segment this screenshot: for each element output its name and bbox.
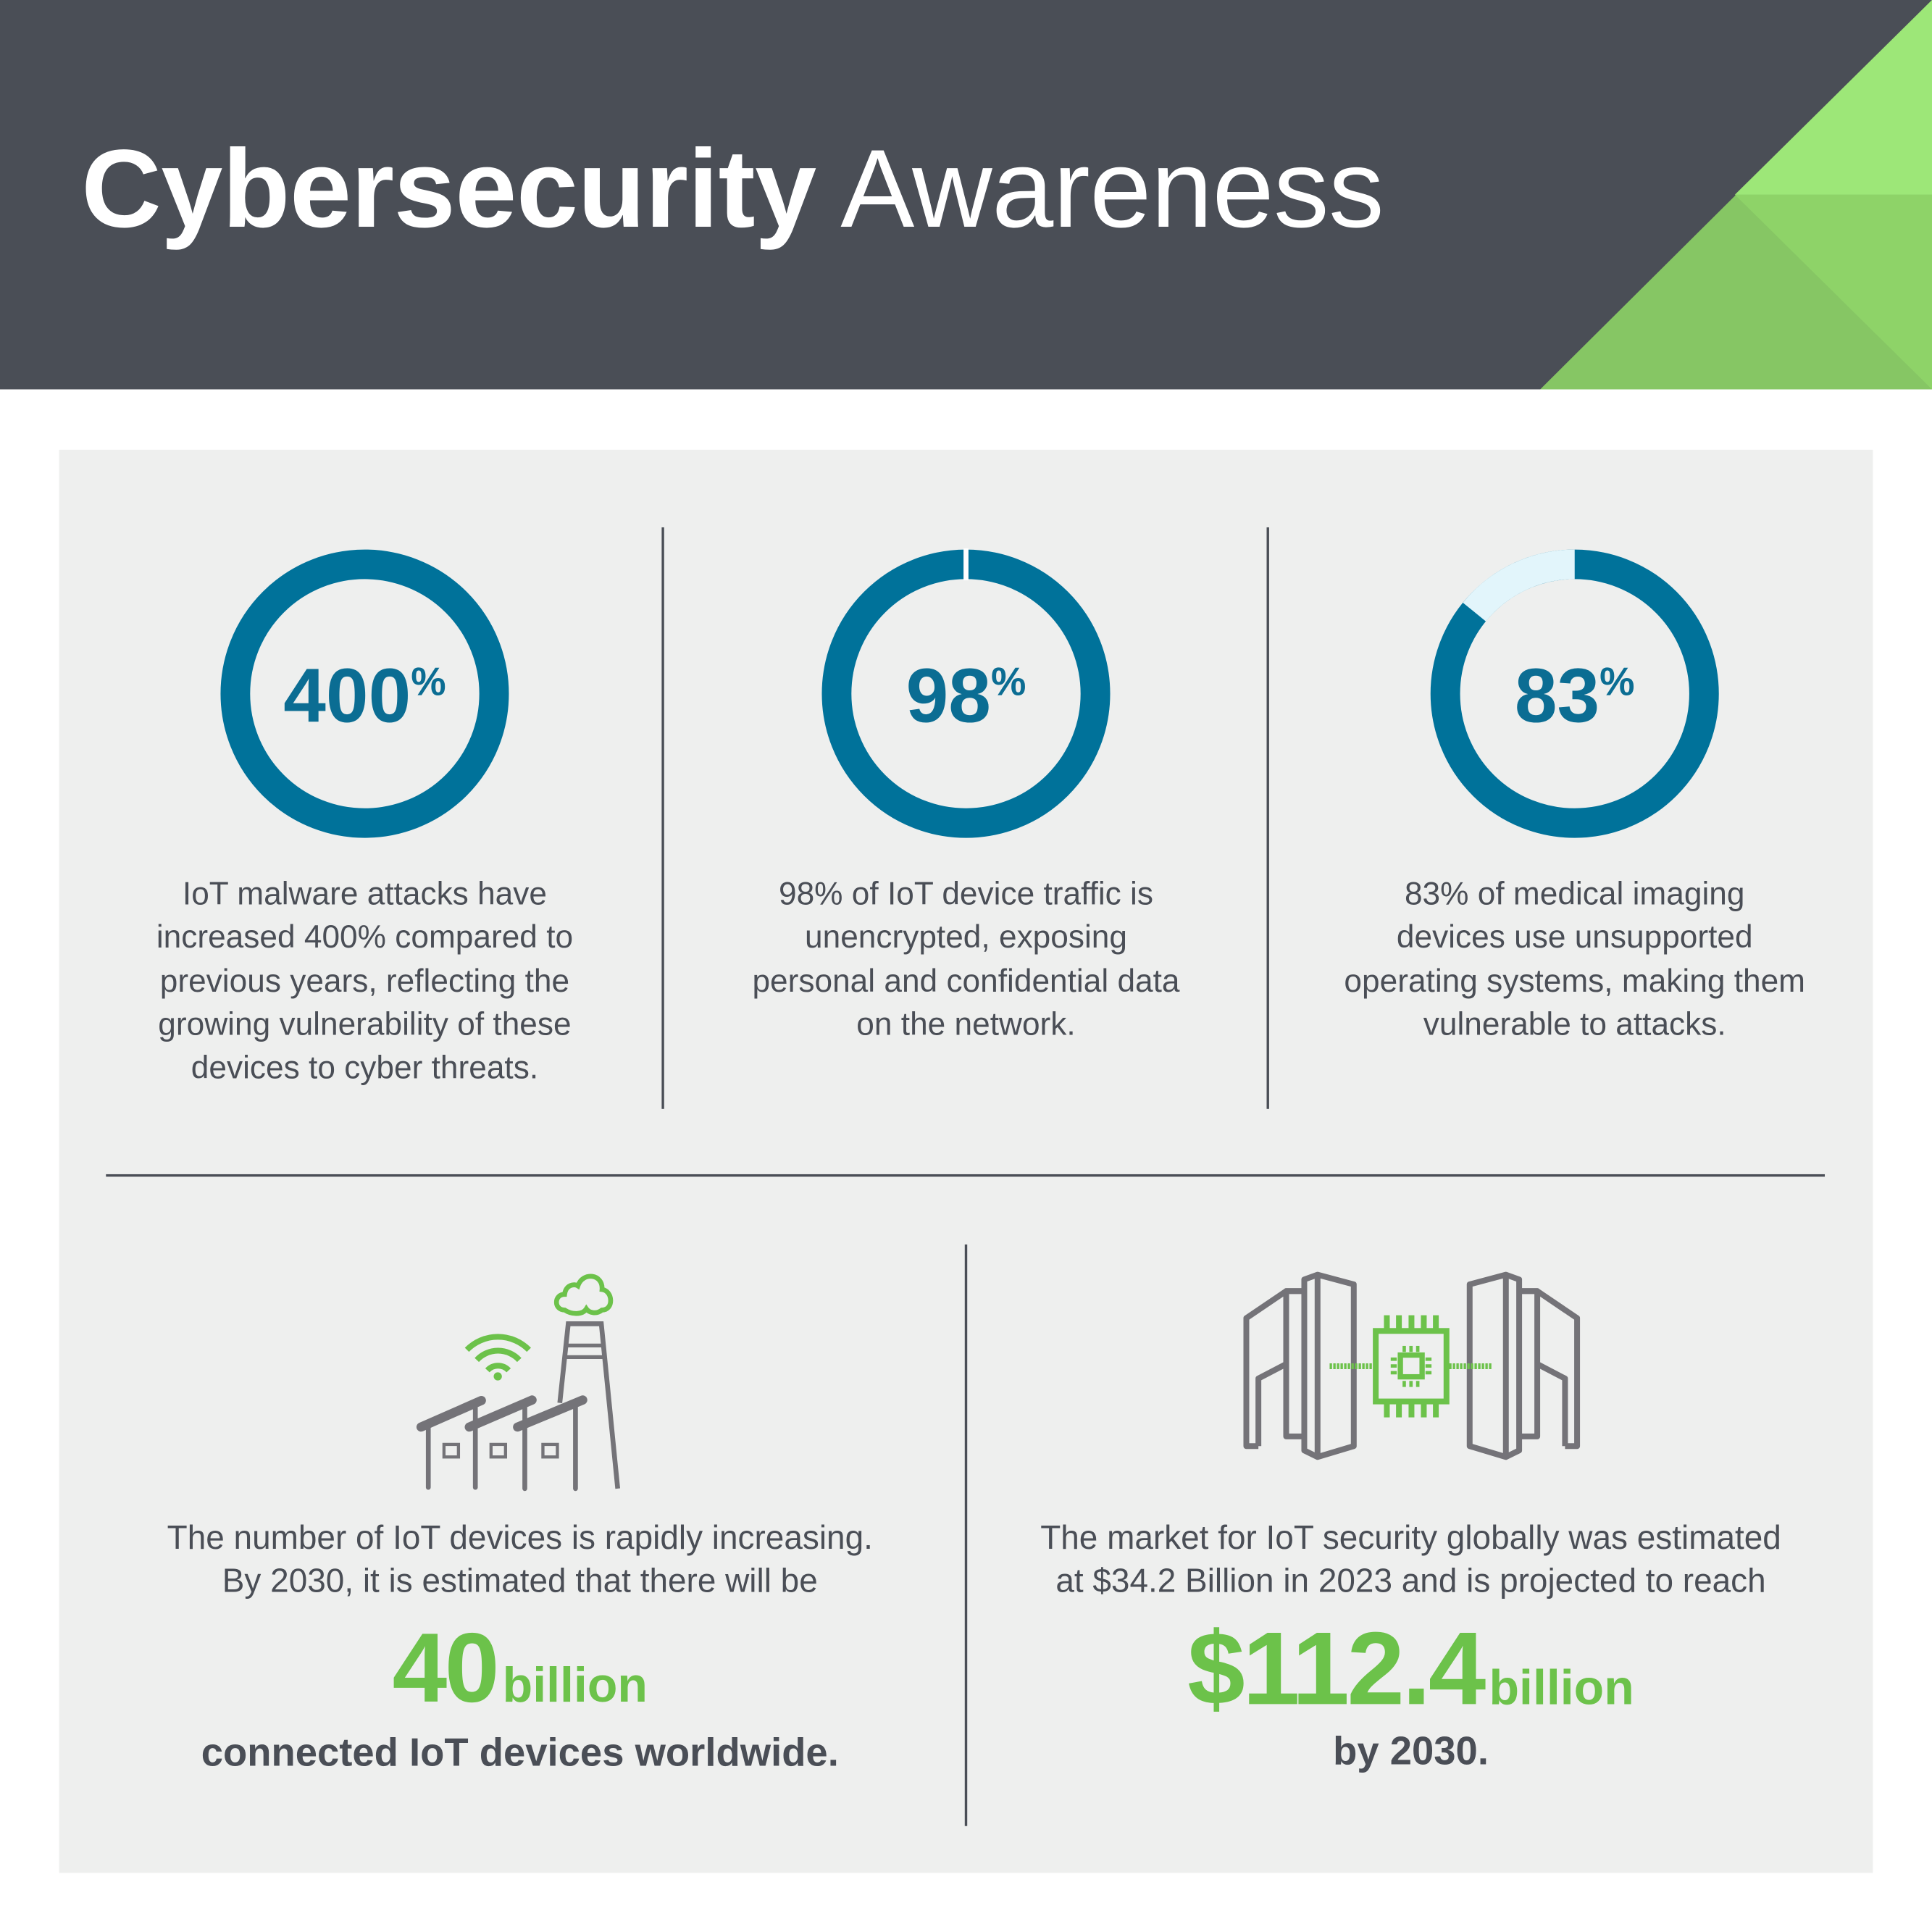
text: 98% description: on the network.	[856, 1005, 1076, 1042]
ring chart: 98%	[821, 548, 1110, 838]
text: IoT devices growth: connected IoT devices worldwide.	[201, 1729, 839, 1774]
header decoration: green triangles	[1540, 0, 1932, 390]
text: 83% description: 83% of medical imaging	[1405, 875, 1744, 912]
text: 400% description	[156, 875, 573, 1086]
big stat: 40 billion: 40 billion	[393, 1613, 648, 1722]
text: 400% description: devices to cyber threats.	[191, 1049, 538, 1086]
text: IoT devices growth: By 2030, it is estimated that there will be	[222, 1563, 818, 1599]
text: 83% description: operating systems, making them	[1344, 962, 1805, 999]
big stat: $112.4 billion: $112.4 billion	[1187, 1610, 1634, 1726]
title: Cybersecurity Awareness	[81, 128, 1384, 251]
text: 400% description: growing vulnerability of these	[158, 1005, 572, 1042]
text: IoT devices growth	[167, 1519, 873, 1774]
ring chart: 400%: 400%	[283, 654, 446, 740]
text: 83% description	[1344, 875, 1805, 1042]
ring chart: 400%	[220, 549, 509, 838]
text: 400% description: previous years, reflecting the	[160, 962, 569, 999]
text: IoT security market: The market for IoT security globally was estimated	[1040, 1519, 1781, 1556]
text: 83% description: devices use unsupported	[1397, 919, 1753, 955]
ring chart: 83%: 83%	[1515, 654, 1635, 740]
text: IoT security market: by 2030.	[1333, 1728, 1489, 1773]
ring chart: 83%	[1430, 549, 1719, 838]
text: 400% description: increased 400% compared to	[156, 919, 573, 955]
icon: servers with chip	[1243, 1272, 1581, 1460]
text: 98% description	[752, 875, 1180, 1042]
text: IoT security market: at $34.2 Billion in 2023 and is projected to reach	[1055, 1563, 1766, 1599]
text: IoT devices growth: The number of IoT devices is rapidly increasing.	[167, 1519, 873, 1556]
text: IoT security market	[1040, 1519, 1781, 1773]
main panel	[59, 450, 1873, 1873]
icon: factory with wifi	[416, 1274, 620, 1491]
text: 98% description: unencrypted, exposing	[805, 919, 1127, 955]
text: 83% description: vulnerable to attacks.	[1423, 1005, 1726, 1042]
header banner	[0, 0, 1932, 389]
text: 98% description: personal and confidential data	[752, 962, 1180, 999]
text: 400% description: IoT malware attacks have	[183, 875, 547, 912]
text: 98% description: 98% of IoT device traffic is	[779, 875, 1153, 912]
ring chart: 98%: 98%	[906, 654, 1026, 740]
